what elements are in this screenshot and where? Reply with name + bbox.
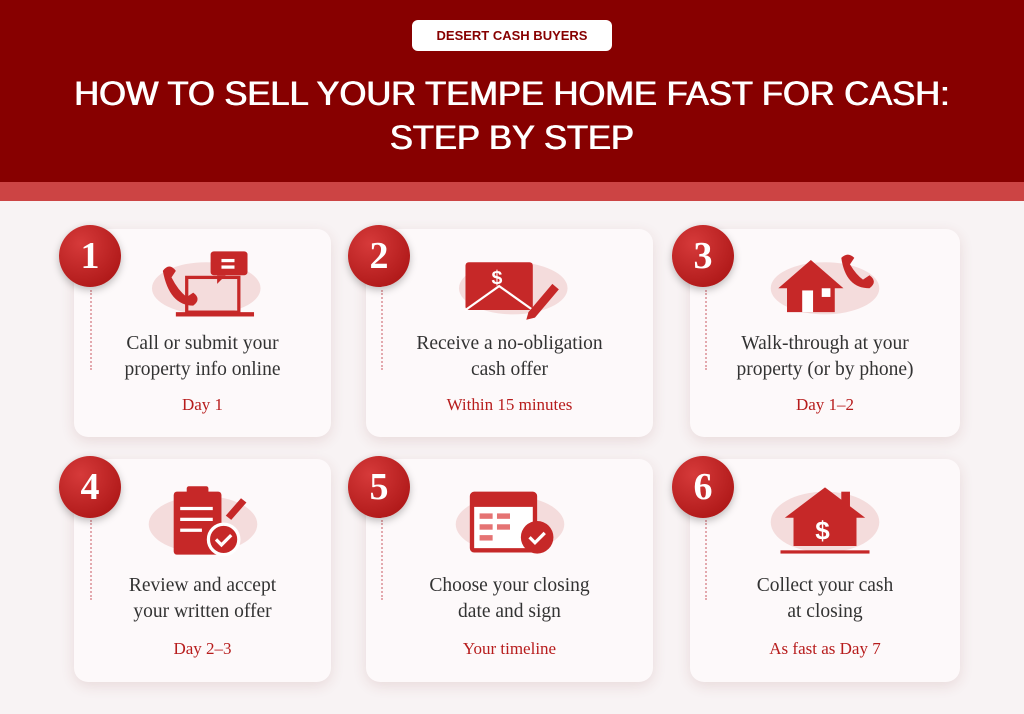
- icon: phone laptop: [152, 251, 260, 316]
- badge 2: 2: [370, 235, 388, 277]
- text: Review and accept: [129, 575, 276, 596]
- text: [416, 333, 603, 380]
- text: [736, 333, 914, 380]
- text: Collect your cash: [757, 575, 893, 596]
- text: [124, 333, 280, 380]
- card 4: [74, 459, 331, 682]
- card 1: [74, 229, 331, 437]
- card 2: Within 15 minutes: [447, 395, 572, 414]
- text: property (or by phone): [736, 359, 914, 380]
- icon: envelope: $: [491, 267, 502, 289]
- card 6: [690, 459, 960, 682]
- badge 4: 4: [80, 466, 100, 508]
- card 4: Day 2–3: [173, 639, 232, 658]
- text: [129, 575, 276, 622]
- text: Walk-through at your: [741, 333, 909, 354]
- badge 6: [672, 456, 734, 518]
- card 6: As fast as Day 7: [769, 639, 881, 658]
- text: Call or submit your: [126, 333, 279, 354]
- badge 2: [348, 225, 410, 287]
- badge 1: 1: [80, 235, 100, 277]
- icon: house dollar: $: [815, 515, 830, 545]
- badge 5: 5: [370, 466, 388, 508]
- card 5: Your timeline: [463, 639, 556, 658]
- text: [429, 575, 590, 622]
- text: Receive a no-obligation: [416, 333, 603, 354]
- card 3: [690, 229, 960, 437]
- icon: calendar: [456, 492, 564, 554]
- badge 6: 6: [694, 466, 712, 508]
- brand label: [412, 20, 612, 51]
- brand label: DESERT CASH BUYERS: [437, 28, 587, 43]
- text: cash offer: [471, 359, 548, 380]
- icon: house dollar: [770, 487, 880, 554]
- text: your written offer: [133, 601, 272, 622]
- text: date and sign: [458, 601, 561, 622]
- card 5: [366, 459, 653, 682]
- badge 1: [59, 225, 121, 287]
- badge 4: [59, 456, 121, 518]
- badge 3: [672, 225, 734, 287]
- text: [757, 575, 893, 622]
- icon: clipboard: [148, 486, 258, 555]
- header banner: [0, 0, 1024, 182]
- text: property info online: [125, 359, 280, 380]
- card 3: Day 1–2: [796, 395, 854, 414]
- title: [74, 75, 950, 157]
- card 2: [366, 229, 653, 437]
- text: at closing: [787, 601, 863, 622]
- badge 5: [348, 456, 410, 518]
- icon: envelope: [459, 262, 568, 320]
- card 1: Day 1: [182, 395, 223, 414]
- icon: house phone: [770, 254, 880, 314]
- title: HOW TO SELL YOUR TEMPE HOME FAST FOR CASH:: [74, 75, 950, 113]
- text: Choose your closing: [429, 575, 590, 596]
- title: STEP BY STEP: [390, 119, 634, 157]
- badge 3: 3: [694, 235, 712, 277]
